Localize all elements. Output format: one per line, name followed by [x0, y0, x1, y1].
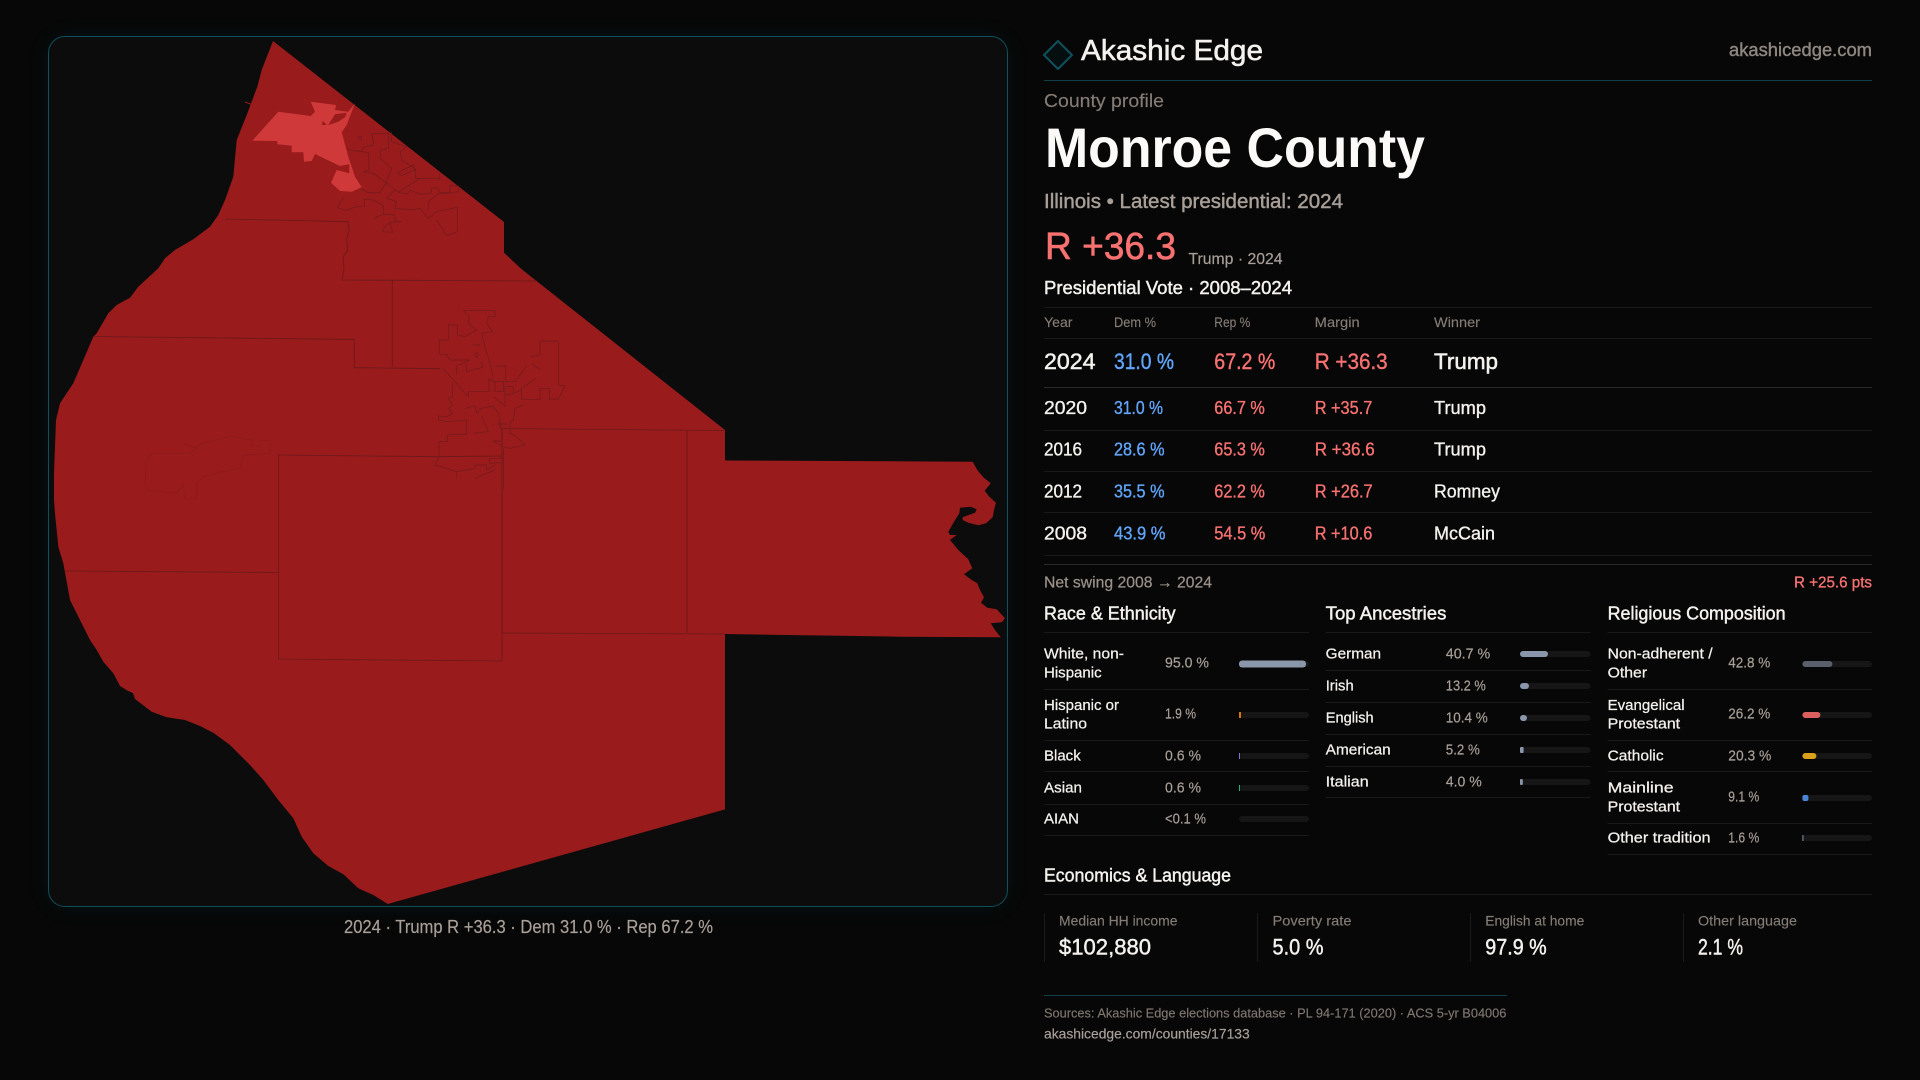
row 2016: 28.6 %: [1114, 439, 1164, 459]
row 2012: R +26.7: [1315, 481, 1373, 501]
table header row: [1044, 314, 1480, 330]
row 2020: 66.7 %: [1214, 398, 1265, 418]
stat: poverty rate: [1258, 913, 1352, 962]
row 2016: Trump: [1434, 439, 1486, 459]
row: Black: 0.6 %: [1165, 748, 1201, 765]
row 2020: 2020: [1044, 398, 1087, 418]
row: American: 5.2 %: [1446, 742, 1480, 759]
site url: akashicedge.com: [1729, 40, 1872, 60]
row: Evangelical Protestant: 26.2 %: [1728, 706, 1770, 723]
urban boundaries: centre: [435, 311, 565, 490]
table heading: Presidential Vote · 2008–2024: [1044, 278, 1292, 298]
row: Non-adherent / Other: Non-adherent /: [1608, 646, 1713, 663]
headline margin: R +36.3: [1045, 226, 1176, 268]
row: AIAN: <0.1 %: [1165, 811, 1206, 828]
row: Other tradition: [1608, 830, 1872, 847]
table header row: Rep %: [1214, 314, 1250, 330]
row: AIAN: AIAN: [1044, 811, 1079, 828]
row 2012: Romney: [1434, 481, 1500, 501]
footer sources: [1044, 996, 1507, 1041]
row: Hispanic or Latino: Latino: [1044, 716, 1087, 733]
row: White, non-Hispanic: White, non-: [1044, 646, 1124, 663]
row 2024: R +36.3: [1315, 349, 1388, 374]
panel: economics and language: [1044, 865, 1872, 962]
row 2012: 2012: [1044, 481, 1082, 501]
row: Asian: [1044, 780, 1309, 797]
stat: other language: Other language: [1698, 913, 1797, 929]
row 2016: 2016: [1044, 439, 1082, 459]
row: Mainline Protestant: [1608, 780, 1872, 815]
row: Italian: Italian: [1326, 774, 1369, 791]
panel: race and ethnicity: [1044, 603, 1309, 836]
county heading: [1044, 91, 1425, 268]
row: English: English: [1326, 710, 1374, 727]
row 2008: 43.9 %: [1114, 523, 1166, 543]
panel: top ancestries: [1326, 603, 1591, 798]
stat: english at home: [1470, 913, 1584, 962]
county outline: [54, 41, 1005, 904]
row: White, non-Hispanic: Hispanic: [1044, 664, 1102, 681]
row: Hispanic or Latino: [1044, 697, 1309, 733]
row 2024: Trump: [1434, 349, 1498, 374]
row: American: [1326, 742, 1591, 759]
row: Other tradition: Other tradition: [1608, 830, 1711, 847]
row: Mainline Protestant: Protestant: [1608, 798, 1681, 815]
row: Irish: Irish: [1326, 678, 1354, 695]
row 2008: R +10.6: [1315, 523, 1372, 543]
stat: english at home: English at home: [1485, 913, 1584, 929]
row 2012: [1044, 481, 1500, 501]
row: Catholic: [1608, 748, 1872, 765]
row 2024: 67.2 %: [1214, 349, 1275, 374]
row 2020: 31.0 %: [1114, 398, 1163, 418]
row: American: American: [1326, 742, 1391, 759]
row: Mainline Protestant: 9.1 %: [1728, 789, 1759, 806]
row: Asian: Asian: [1044, 780, 1082, 797]
stat: other language: 2.1 %: [1698, 935, 1743, 960]
title: Monroe County: [1045, 116, 1425, 179]
brand name: Akashic Edge: [1081, 35, 1263, 67]
subtitle: Illinois • Latest presidential: 2024: [1044, 191, 1343, 213]
row: Catholic: Catholic: [1608, 748, 1664, 765]
lighter precinct: [252, 102, 362, 192]
headline winner: Trump · 2024: [1188, 251, 1283, 268]
footer sources: Sources: Akashic Edge elections database · PL 94-171 (2020) · ACS 5-yr B04006: [1044, 1005, 1506, 1020]
row: Non-adherent / Other: 42.8 %: [1728, 655, 1770, 672]
table header row: Dem %: [1114, 314, 1156, 330]
heading: Top Ancestries: [1326, 603, 1446, 623]
row: Hispanic or Latino: Hispanic or: [1044, 697, 1119, 714]
stat: median income: $102,880: [1059, 935, 1151, 960]
table header row: Margin: [1315, 314, 1360, 330]
stat: median income: Median HH income: [1059, 913, 1178, 929]
row: Italian: 4.0 %: [1446, 774, 1482, 791]
urban boundaries: north: [337, 132, 459, 236]
row 2008: [1044, 523, 1495, 543]
row 2020: [1044, 398, 1486, 418]
row: German: [1326, 646, 1591, 663]
row: Irish: 13.2 %: [1446, 678, 1486, 695]
net swing line: Net swing 2008 → 2024: [1044, 574, 1212, 591]
panel: religious composition: [1608, 603, 1872, 854]
row: Black: Black: [1044, 748, 1081, 765]
map caption: 2024 · Trump R +36.3 · Dem 31.0 % · Rep 67.2 %: [344, 917, 713, 937]
net swing line: R +25.6 pts: [1794, 574, 1872, 591]
row: German: German: [1326, 646, 1381, 663]
eyebrow: County profile: [1044, 91, 1164, 111]
row: Evangelical Protestant: Protestant: [1608, 716, 1681, 733]
row: White, non-Hispanic: 95.0 %: [1165, 655, 1209, 672]
row: AIAN: [1044, 811, 1309, 828]
row 2024: 31.0 %: [1114, 349, 1174, 374]
row 2016: [1044, 439, 1486, 459]
net swing line: [1044, 564, 1872, 591]
stat: median income: [1044, 913, 1178, 962]
row 2012: 35.5 %: [1114, 481, 1164, 501]
row 2024: [1044, 349, 1498, 374]
row: Non-adherent / Other: Other: [1608, 664, 1647, 681]
row: English: [1326, 710, 1591, 727]
heading: Race & Ethnicity: [1044, 603, 1176, 623]
panel: county map: [48, 36, 1008, 907]
row: Evangelical Protestant: [1608, 697, 1872, 733]
footer sources: akashicedge.com/counties/17133: [1044, 1025, 1250, 1041]
stat: other language: [1684, 913, 1797, 962]
row: White, non-Hispanic: [1044, 646, 1309, 681]
heading: Economics & Language: [1044, 865, 1231, 885]
row 2008: McCain: [1434, 523, 1495, 543]
row 2020: R +35.7: [1315, 398, 1372, 418]
row: Irish: [1326, 678, 1591, 695]
row: Mainline Protestant: Mainline: [1608, 780, 1674, 797]
row 2008: 54.5 %: [1214, 523, 1265, 543]
stat: poverty rate: 5.0 %: [1272, 935, 1324, 960]
row: Italian: [1326, 774, 1591, 791]
township boundaries: [65, 219, 725, 661]
urban boundaries: west: [145, 436, 270, 498]
row: Black: [1044, 748, 1309, 765]
row 2016: R +36.6: [1315, 439, 1375, 459]
heading: Religious Composition: [1608, 603, 1786, 623]
brand header: [1044, 35, 1872, 80]
stat: english at home: 97.9 %: [1485, 935, 1547, 960]
row 2016: 65.3 %: [1214, 439, 1265, 459]
row: English: 10.4 %: [1446, 710, 1488, 727]
row: Hispanic or Latino: 1.9 %: [1165, 706, 1196, 723]
table: presidential vote: [1044, 278, 1872, 556]
row 2012: 62.2 %: [1214, 481, 1265, 501]
row: Asian: 0.6 %: [1165, 780, 1201, 797]
row: Catholic: 20.3 %: [1728, 748, 1771, 765]
icon: diamond logo: [1044, 41, 1072, 69]
row: German: 40.7 %: [1446, 646, 1490, 663]
row 2020: Trump: [1434, 398, 1486, 418]
row: Evangelical Protestant: Evangelical: [1608, 697, 1685, 714]
stat: poverty rate: Poverty rate: [1272, 913, 1352, 929]
row: Other tradition: 1.6 %: [1728, 830, 1759, 847]
table header row: Year: [1044, 314, 1073, 330]
row 2008: 2008: [1044, 523, 1087, 543]
row 2024: 2024: [1044, 349, 1096, 374]
table header row: Winner: [1434, 314, 1480, 330]
row: Non-adherent / Other: [1608, 646, 1872, 681]
